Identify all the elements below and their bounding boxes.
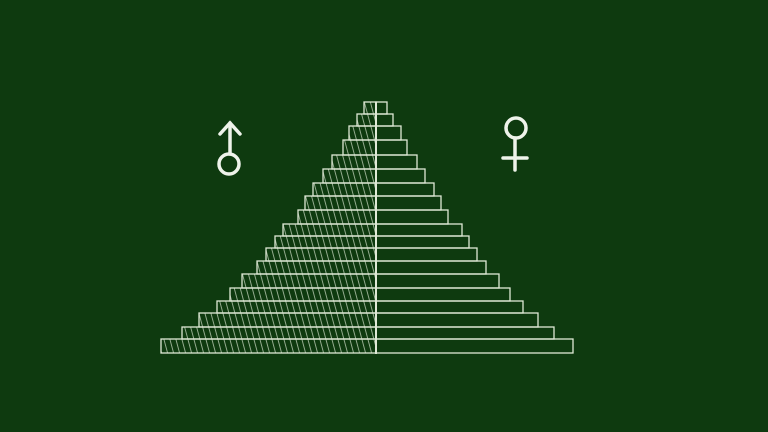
population pyramid: [161, 102, 573, 354]
icon: male symbol: [219, 123, 240, 174]
male bars: [161, 102, 376, 353]
icon: female symbol: [503, 118, 527, 170]
female bars: [376, 102, 573, 353]
